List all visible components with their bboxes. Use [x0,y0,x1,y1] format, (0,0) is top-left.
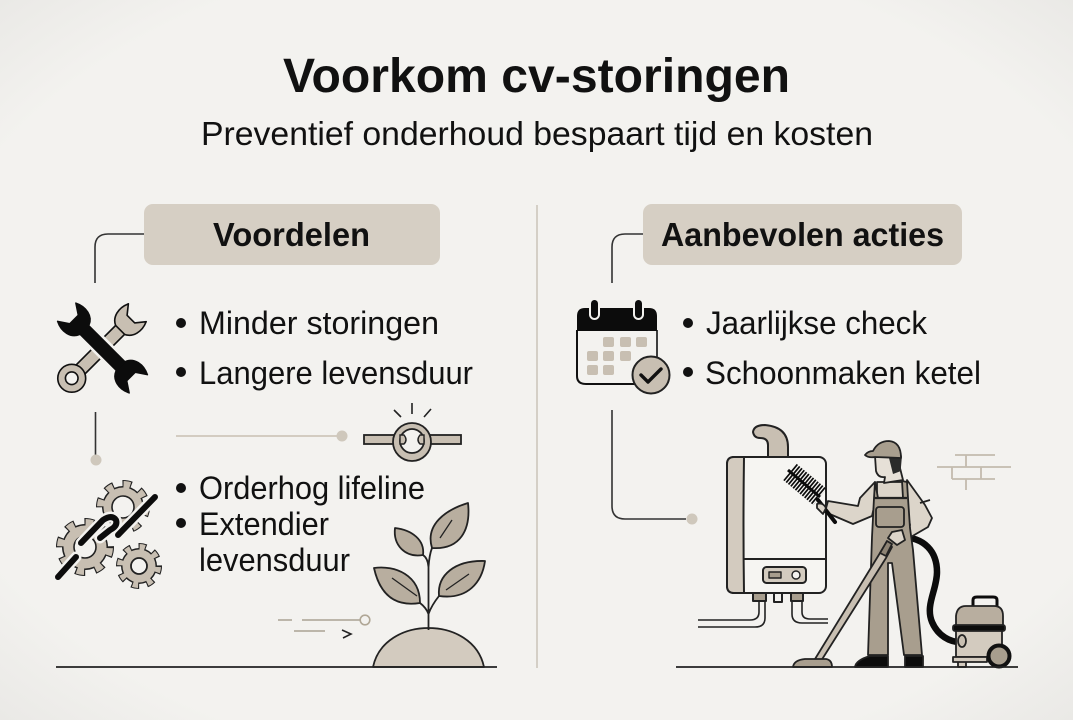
list: voordelen bottom: Extendier [199,506,329,542]
panel: aanbevolen acties [577,204,1018,667]
gear: top [100,484,146,530]
list: voordelen bottom [176,470,425,578]
worker shirt and arms [825,482,876,524]
worker overalls [868,481,922,655]
connector: line to pipe [176,430,348,442]
icon: growing plant [373,503,485,667]
boiler body [727,457,826,593]
icon: gears with broken chain [58,484,158,586]
heading: voordelen: Voordelen [213,216,370,253]
decorative small lines [278,615,370,638]
list: voordelen top: Minder storingen [199,305,439,341]
icon: calendar with check [577,299,670,394]
worker head and cap [875,456,903,483]
list: aanbevolen acties [683,305,981,391]
connector: heading to calendar [612,234,643,283]
list: aanbevolen acties: Jaarlijkse check [706,305,928,341]
icon: crossed wrenches [51,301,149,399]
heading: aanbevolen acties: Aanbevolen acties [661,216,944,253]
list: voordelen bottom: levensduur [199,542,350,578]
vacuum wand [815,543,892,661]
connector: calendar to boiler [612,410,698,524]
list: aanbevolen acties: Schoonmaken ketel [705,355,981,391]
boiler control panel [763,567,806,583]
vacuum body [973,597,997,606]
title: Voorkom cv-storingen [283,50,790,103]
list: voordelen top: Langere levensduur [199,355,473,391]
worker bib pocket [876,507,904,527]
icon: pipe joint [364,403,461,461]
list: voordelen top [176,305,473,391]
illustration: boiler [698,425,828,627]
chain [58,497,155,577]
subtitle: Preventief onderhoud bespaart tijd en kosten [201,115,873,152]
brush [788,470,835,522]
panel: voordelen [51,204,497,667]
illustration: brick wall lines [937,455,1011,490]
gear: left [60,522,110,572]
worker boots [855,656,923,667]
vacuum hose [900,537,960,642]
boiler flue [753,425,788,458]
gear: small [120,546,158,586]
heading: voordelen [144,204,440,265]
connector: heading to tools [95,234,144,283]
heading: aanbevolen acties [643,204,962,265]
illustration: vacuum cleaner [900,537,1010,667]
boiler pipes [698,601,828,627]
worker right hand [888,530,905,545]
illustration: worker [788,441,932,667]
list: voordelen bottom: Orderhog lifeline [199,470,425,506]
connector: tools to gears [90,412,102,466]
